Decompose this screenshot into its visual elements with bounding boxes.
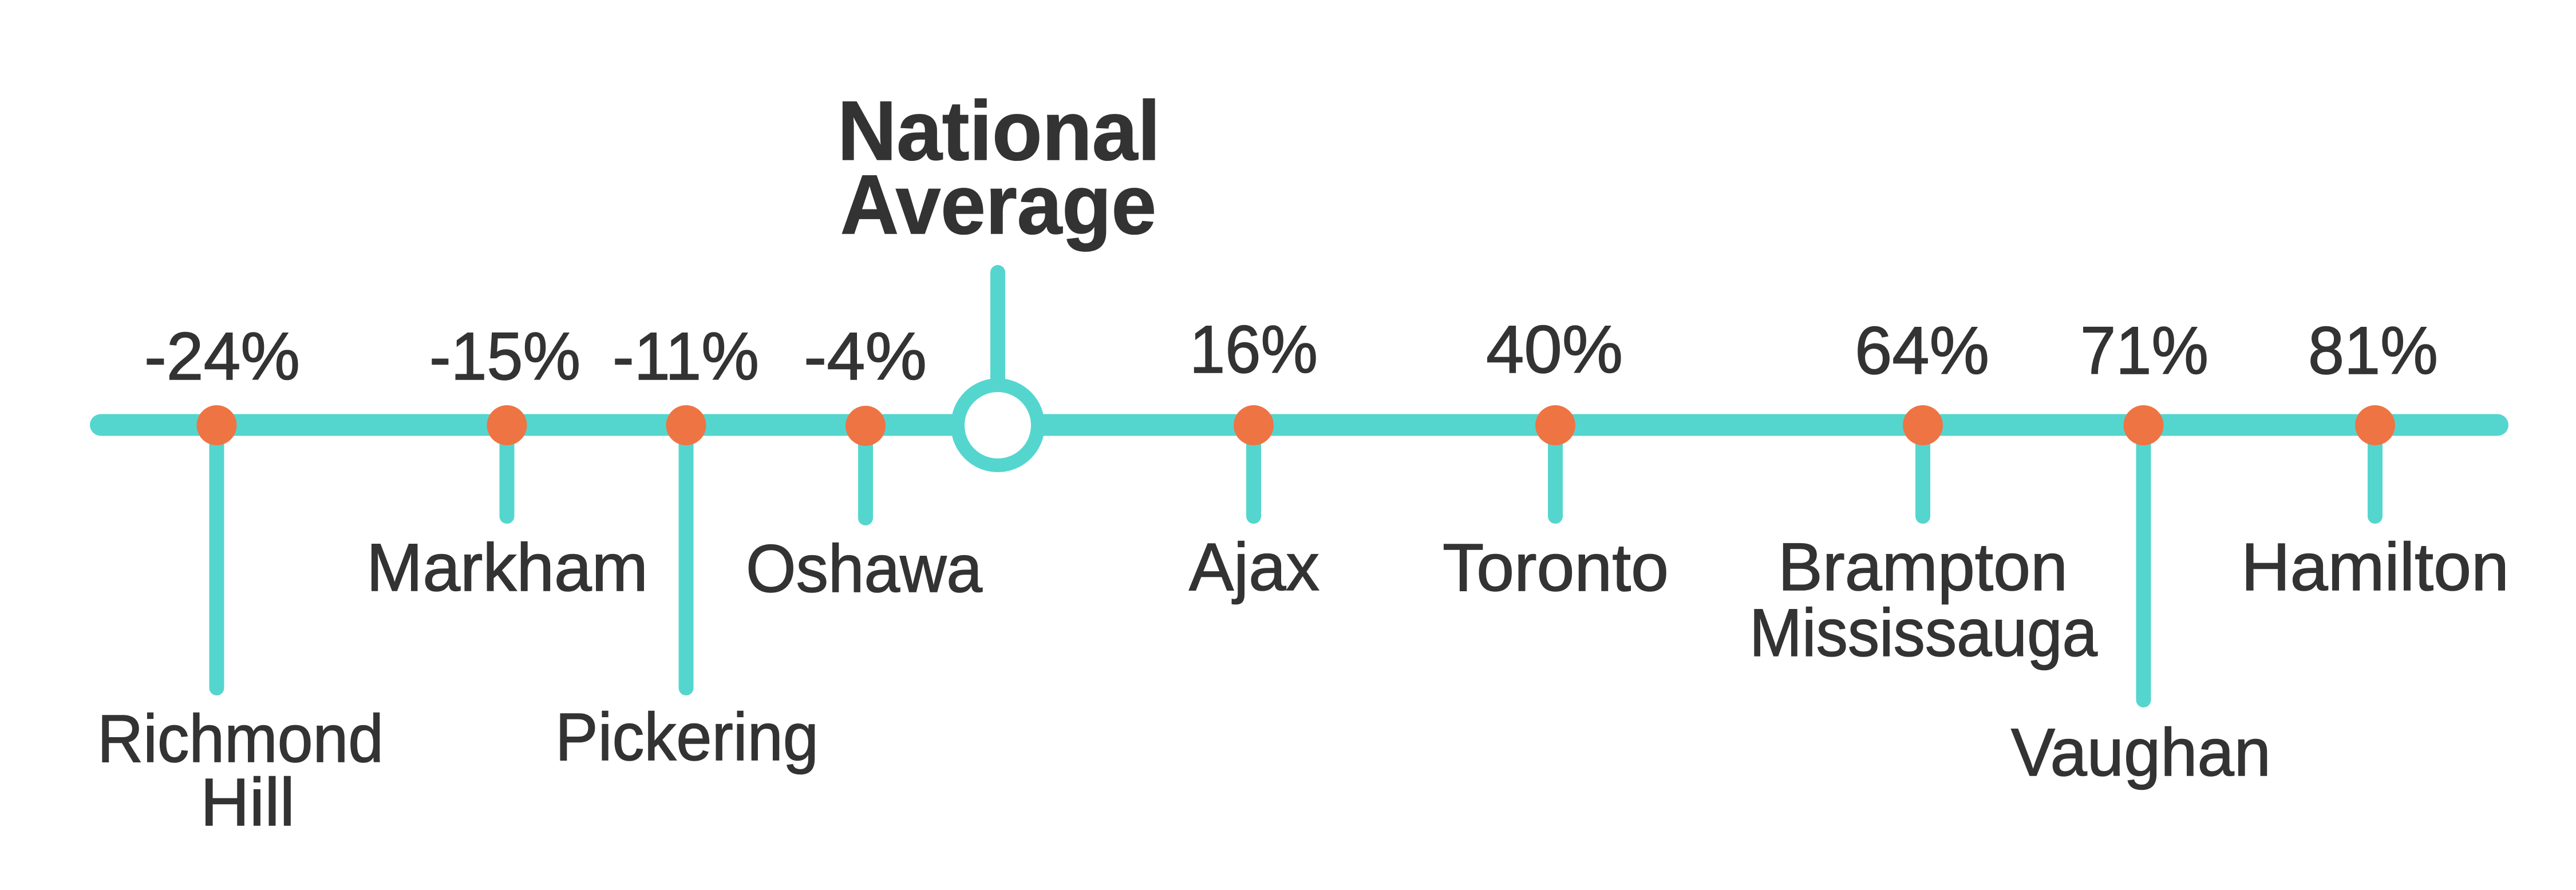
marker: Toronto 40% [1443, 312, 1669, 606]
marker: Vaughan 71%: Vaughan [2011, 715, 2271, 790]
marker: Richmond Hill -24%: Richmond [97, 701, 384, 777]
marker: Pickering -11%: -11% [613, 319, 759, 394]
marker: Toronto 40%: Toronto [1443, 530, 1669, 606]
marker: Pickering -11%: Pickering [555, 699, 819, 775]
marker: Brampton and Mississauga 64%: Mississauga [1749, 595, 2097, 671]
marker: Ajax 16%: Ajax [1189, 529, 1319, 605]
marker: Vaughan 71% [2011, 313, 2271, 790]
marker: Markham -15% [366, 319, 648, 606]
marker: Oshawa -4%: -4% [804, 319, 927, 394]
heading: National Average: National [837, 84, 1160, 178]
marker: Richmond Hill -24% [97, 319, 384, 840]
marker: Oshawa -4% [746, 319, 982, 607]
marker: Brampton and Mississauga 64%: 64% [1855, 313, 1989, 389]
national average marker [837, 84, 1160, 465]
marker: Brampton and Mississauga 64% [1749, 313, 2097, 671]
marker: Ajax 16%: 16% [1190, 312, 1318, 387]
marker: Pickering -11% [555, 319, 819, 775]
heading: National Average [837, 84, 1160, 252]
main horizontal line [101, 414, 2498, 436]
marker: Hamilton 81% [2241, 313, 2509, 605]
national average stem [990, 272, 1005, 383]
national average ring [958, 385, 1038, 465]
marker: Vaughan 71%: 71% [2080, 313, 2208, 389]
marker: Brampton and Mississauga 64%: Brampton [1778, 529, 2068, 605]
marker: Richmond Hill -24%: -24% [144, 319, 300, 394]
heading: National Average: Average [840, 158, 1156, 252]
marker: Markham -15%: -15% [429, 319, 580, 394]
marker: Hamilton 81%: Hamilton [2241, 529, 2509, 605]
marker: Ajax 16% [1189, 312, 1319, 605]
marker: Markham -15%: Markham [366, 530, 648, 606]
marker: Toronto 40%: 40% [1486, 312, 1623, 387]
marker: Richmond Hill -24%: Hill [200, 765, 295, 840]
marker: Oshawa -4%: Oshawa [746, 531, 982, 607]
marker: Hamilton 81%: 81% [2308, 313, 2438, 389]
